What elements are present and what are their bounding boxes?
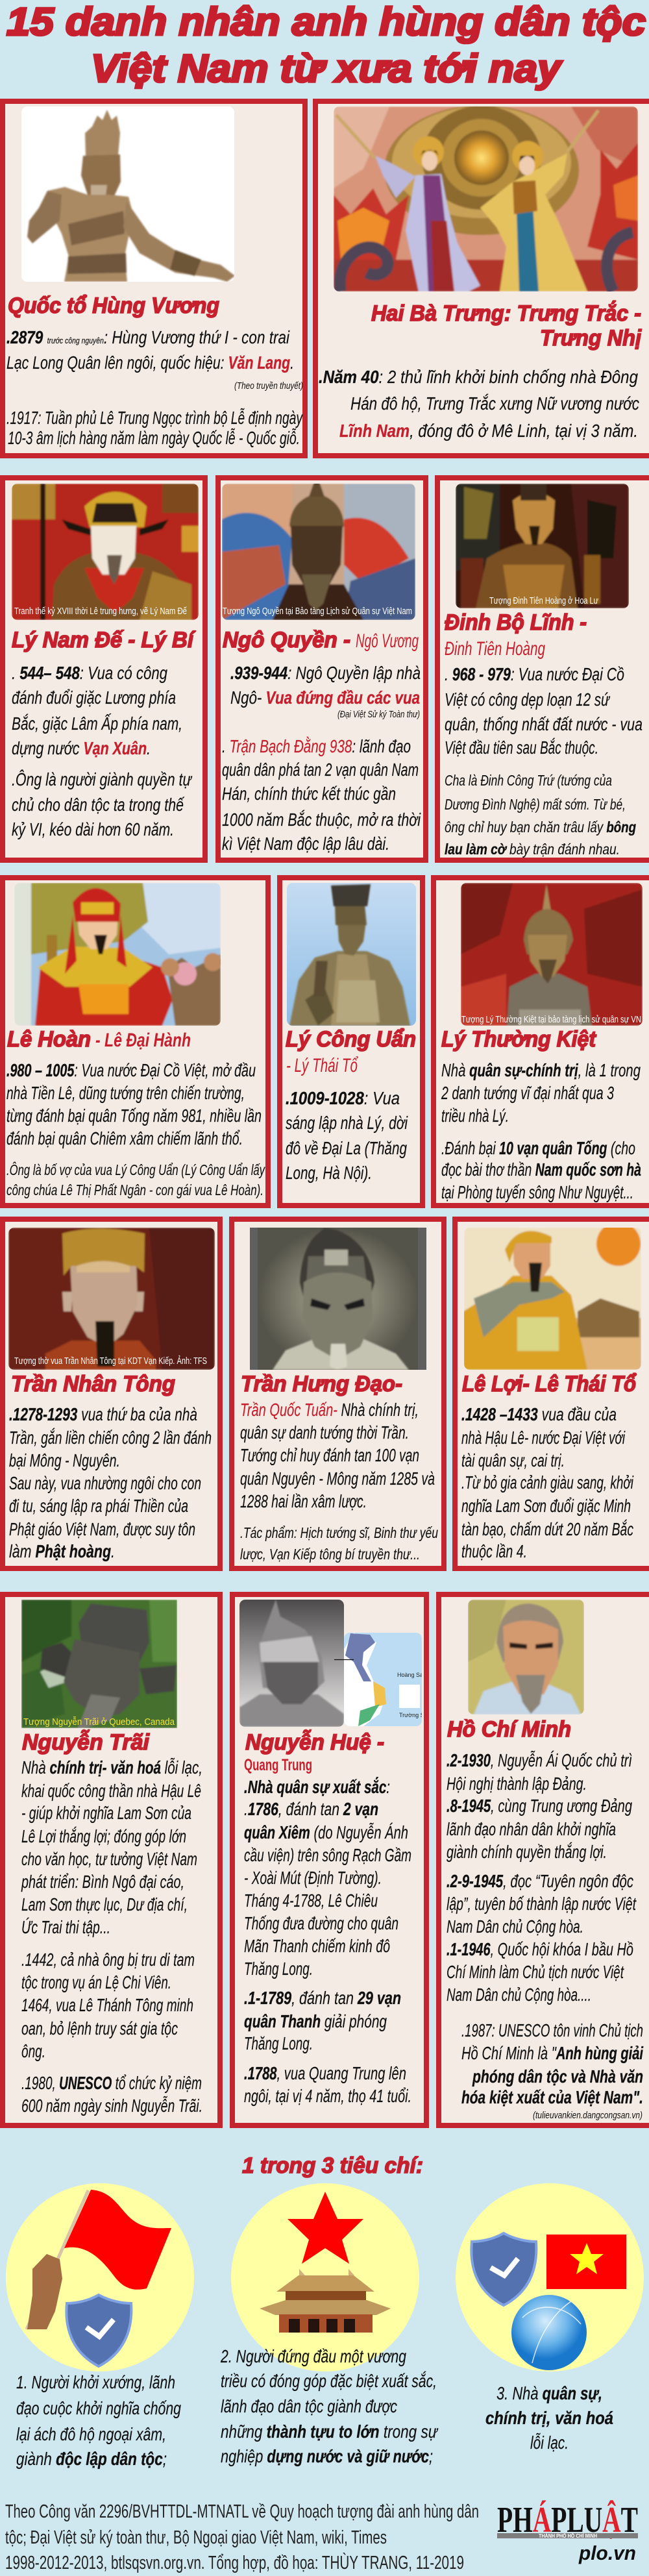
- text block: [319, 367, 639, 441]
- image caption: Tượng Đinh Tiên Hoàng ở Hoa Lư: [489, 595, 598, 606]
- text block: Ức Trai thi tập...: [21, 1917, 110, 1937]
- logo: Pháp Luật plo.vn: PHÁPLUẬT: [497, 2499, 638, 2540]
- text block: đánh bại quân Chiêm xâm chiếm lãnh thổ.: [6, 1128, 243, 1148]
- text block: .Ông là bố vợ của vua Lý Công Uẩn (Lý Công Uẩn lấy: [6, 1161, 265, 1178]
- image: Lý Công Uẩn statue: [287, 883, 416, 1026]
- criterion text: nghiệp dựng nước và giữ nước;: [221, 2446, 433, 2466]
- text block: ngôi, tại vị 4 năm, thọ 41 tuổi.: [244, 2086, 411, 2106]
- logo: Pháp Luật plo.vn: plo.vn: [578, 2542, 636, 2564]
- text block: Trần, gắn liền chiến công 2 lần đánh: [9, 1428, 212, 1448]
- text block: .1428 –1433 vua đầu của: [461, 1404, 617, 1424]
- criterion text: 2. Người đứng đầu một vương: [220, 2346, 406, 2366]
- logo: Pháp Luật plo.vn: [497, 2499, 638, 2564]
- heading: Trần Hưng Đạo-: [241, 1372, 402, 1396]
- panel: Lý Nam Đế: [3, 478, 205, 860]
- text block: Nhà chính trị- văn hoá lỗi lạc,: [21, 1757, 202, 1777]
- text block: .939-944: Ngô Quyền lập nhà: [230, 663, 421, 683]
- text block: [445, 664, 643, 858]
- text block: Hán, chính thức kết thúc gần: [222, 784, 396, 804]
- text block: Mãn Thanh chiếm kinh đô: [244, 1936, 390, 1956]
- text block: phát triển: Bình Ngô đại cáo,: [21, 1872, 184, 1892]
- heading: - Lê Đại Hành: [95, 1030, 191, 1051]
- text block: 600 năm ngày sinh Nguyễn Trãi.: [21, 2096, 202, 2116]
- heading: Hồ Chí Minh: [447, 1717, 571, 1742]
- text block: Tướng chỉ huy đánh tan 100 vạn: [240, 1445, 419, 1465]
- criterion text: 3. Nhà quân sự,: [496, 2383, 602, 2403]
- heading: [244, 1730, 384, 1774]
- heading: Lê Hoàn: [7, 1027, 91, 1052]
- text block: .1009-1028: Vua: [286, 1088, 400, 1108]
- heading: criteria: 1 trong 3 tiêu chí:: [242, 2153, 423, 2178]
- panel: Hai Bà Trưng: [315, 101, 649, 456]
- heading: Trần Nhân Tông: [11, 1372, 175, 1396]
- criterion text: lỗi lạc.: [530, 2433, 569, 2453]
- text block: .1786, đánh tan 2 vạn: [244, 1799, 378, 1819]
- heading: Ngô Quyền -: [223, 628, 350, 652]
- text block: ông chỉ huy bạn chăn trâu lấy bông: [445, 819, 636, 836]
- text block: .1917: Tuần phủ Lê Trung Ngọc trình bộ Lễ định ngày: [6, 408, 303, 428]
- panel: Nguyễn Trãi: [3, 1594, 220, 2125]
- criterion text: chính trị, văn hoá: [485, 2408, 613, 2428]
- criterion text: những thành tựu to lớn trong sự: [221, 2421, 439, 2442]
- title: 15 danh nhân anh hùng dân tộc: [6, 0, 646, 43]
- text block: 1000 năm Bắc thuộc, mở ra thời: [222, 810, 421, 830]
- image: Ngô Quyền bust: [222, 480, 415, 620]
- text block: (Đại Việt Sử ký Toàn thư): [337, 709, 420, 720]
- text block: - Xoài Mút (Định Tường).: [244, 1868, 382, 1888]
- heading: [223, 628, 419, 652]
- title: Việt Nam từ xưa tới nay: [91, 47, 563, 90]
- heading: Lý Thường Kiệt: [441, 1027, 597, 1052]
- text block: .1-1789, đánh tan 29 vạn: [244, 1988, 401, 2008]
- heading: [7, 1027, 191, 1052]
- criterion text: [16, 2372, 181, 2469]
- text block: .1442, cả nhà ông bị tru di tam: [21, 1950, 195, 1970]
- icon: raised flag: [27, 2190, 171, 2329]
- image: Lý Nam Đế painting: [12, 484, 199, 620]
- image caption: Tượng thờ vua Trần Nhân Tông tại KDT Vạn Kiếp. Ảnh: TFS: [14, 1356, 207, 1367]
- text block: Lê Lợi thắng lợi; đóng góp lớn: [21, 1826, 186, 1846]
- icon: red star: [288, 2192, 363, 2264]
- text block: [447, 1750, 644, 2121]
- source note: tộc; Đại Việt sử ký toàn thư, Bộ Ngoại giao Việt Nam, wiki, Times: [5, 2527, 387, 2548]
- text block: triều nhà Lý.: [441, 1106, 509, 1126]
- text block: Tháng 4-1788, Lê Chiêu: [244, 1890, 378, 1911]
- heading: Đinh Tiên Hoàng: [445, 638, 545, 660]
- criterion text: [485, 2383, 613, 2453]
- panel: Lý Công Uẩn: [280, 878, 422, 1206]
- panel: Trần Nhân Tông: [3, 1219, 220, 1568]
- text block: công chúa Lê Thị Phất Ngân - con gái vua Lê Hoàn).: [6, 1182, 263, 1198]
- text block: 10-3 âm lịch hàng năm làm ngày Quốc lễ - Quốc giỗ.: [8, 428, 300, 448]
- heading: Quang Trung: [244, 1756, 312, 1774]
- text block: sáng lập nhà Lý, dời: [286, 1113, 408, 1133]
- text block: quân dân phá tan 2 vạn quân Nam: [222, 760, 419, 780]
- icon: imperial palace: [260, 2269, 391, 2333]
- text block: . 544– 548: Vua có công: [12, 663, 167, 683]
- text block: [461, 1404, 634, 1561]
- text block: đánh đuổi giặc Lương phía: [12, 687, 176, 708]
- image: Trần Hưng Đạo portrait: [250, 1228, 426, 1370]
- text block: .Ông là người giành quyền tự: [12, 769, 193, 789]
- map pointer line: [334, 1659, 354, 1661]
- text block: nhà Tiền Lê, dũng tướng trên chiến trường,: [6, 1083, 245, 1103]
- text block: . Trận Bạch Đằng 938: lãnh đạo: [222, 736, 411, 756]
- image: Đinh Tiên Hoàng statue: [456, 484, 629, 608]
- text block: [441, 1060, 641, 1202]
- image caption: Tượng Ngô Quyền tại Bảo tàng Lịch sử Quân sự Việt Nam: [223, 606, 412, 617]
- heading: Lý Nam Đế - Lý Bí: [12, 628, 196, 652]
- text block: quân Thanh giải phóng: [244, 2011, 387, 2031]
- text block: 1464, vua Lê Thánh Tông minh: [21, 1995, 193, 2015]
- text block: quân Nguyên - Mông năm 1285 và: [240, 1468, 435, 1489]
- text block: .Đánh bại 10 vạn quân Tống (cho: [441, 1138, 635, 1158]
- text block: tộc trong vụ án Lệ Chi Viên.: [21, 1972, 171, 1992]
- text block: làm Phật hoàng.: [9, 1541, 115, 1561]
- yellow circle: [231, 2183, 419, 2372]
- panel: Ngô Quyền: [218, 478, 426, 860]
- text block: quân sự danh tướng thời Trần.: [240, 1422, 409, 1443]
- text block: Bắc, giặc Lâm Ấp phía nam,: [12, 713, 182, 734]
- text block: [244, 1777, 411, 2106]
- icon: shield with check: [471, 2233, 536, 2305]
- text block: Sau này, vua nhường ngôi cho con: [9, 1473, 201, 1493]
- text block: [12, 663, 193, 839]
- text block: .980 – 1005: Vua nước Đại Cồ Việt, mở đầu: [6, 1060, 256, 1080]
- heading: Lê Lợi- Lê Thái Tổ: [462, 1372, 637, 1396]
- text block: .Nhà quân sự xuất sắc:: [244, 1777, 390, 1797]
- image: Lê Lợi painting: [463, 1222, 641, 1370]
- text block: bại Mông - Nguyên.: [9, 1450, 120, 1470]
- image: map of Vietnam: Trường Sa: [399, 1712, 428, 1718]
- text block: Thăng Long.: [244, 1959, 313, 1979]
- heading: [371, 301, 642, 351]
- source note: 1998-2012-2013, btlsqsvn.org.vn. Tổng hợp, đồ họa: THÙY TRANG, 11-2019: [5, 2552, 464, 2573]
- text block: .1788, vua Quang Trung lên: [244, 2063, 406, 2083]
- criterion text: [220, 2346, 439, 2466]
- text block: Long, Hà Nội).: [286, 1163, 372, 1183]
- text block: quân Xiêm (do Nguyễn Ánh: [244, 1822, 408, 1842]
- heading: Đinh Bộ Lĩnh -: [445, 610, 587, 635]
- text block: [9, 1404, 212, 1561]
- text block: đi tu, sáng lập ra phái Thiền của: [9, 1496, 188, 1516]
- text block: chủ cho dân tộc ta trong thế: [12, 795, 185, 815]
- text block: từng đánh bại quân Tống năm 981, nhiều lần: [6, 1106, 262, 1126]
- text block: .Tác phẩm: Hịch tướng sĩ, Binh thư yếu: [240, 1524, 438, 1541]
- heading: Quốc tổ Hùng Vương: [8, 293, 219, 318]
- image caption: Tranh thế kỷ XVIII thời Lê trung hưng, vẽ Lý Nam Đế: [14, 606, 187, 617]
- text block: - giúp khởi nghĩa Lam Sơn của: [21, 1803, 191, 1823]
- text block: (Theo truyền thuyết): [234, 380, 303, 391]
- text block: Hội nghị thành lập Đảng.: [447, 1774, 587, 1794]
- text block: Phật giáo Việt Nam, được suy tôn: [9, 1519, 195, 1539]
- image: Hồ Chí Minh portrait: [468, 1600, 584, 1715]
- logo: Pháp Luật plo.vn: THÀNH PHỐ HỒ CHÍ MINH: [539, 2533, 597, 2539]
- panel: Đinh Bộ Lĩnh: [437, 478, 649, 860]
- text block: Nam Dân chủ Cộng hòa.: [447, 1916, 583, 1937]
- text block: [6, 1060, 265, 1198]
- criterion text: triều có đóng góp đặc biệt xuất sắc,: [221, 2371, 437, 2391]
- panel: Nguyễn Huệ: [232, 1594, 428, 2125]
- image: Hai Bà Trưng: [334, 105, 638, 291]
- panel: Hồ Chí Minh: [439, 1594, 649, 2125]
- text block: Lam Sơn thực lục, Dư địa chí,: [21, 1894, 188, 1914]
- heading: Ngô Vương: [356, 630, 419, 652]
- text block: đô về Đại La (Thăng: [286, 1138, 407, 1158]
- image caption: Tượng Nguyễn Trãi ở Quebec, Canada: [23, 1716, 175, 1728]
- panel: Lê Lợi: [455, 1219, 649, 1568]
- text block: ông.: [21, 2041, 45, 2061]
- image: map of Vietnam: [344, 1633, 428, 1726]
- text block: Lạc Long Quân lên ngôi, quốc hiệu: Văn Lang.: [6, 353, 294, 373]
- heading: [286, 1027, 416, 1076]
- heading: - Lý Thái Tổ: [286, 1055, 359, 1076]
- yellow circle: [6, 2183, 194, 2372]
- yellow circle: [456, 2183, 644, 2372]
- text block: tài quân sự, cai trị.: [461, 1450, 565, 1470]
- image: map of Vietnam: Hoàng Sa: [397, 1672, 423, 1678]
- heading: [445, 610, 587, 660]
- text block: Thống đưa đường cho quân: [244, 1913, 398, 1933]
- icon: globe: [511, 2295, 587, 2370]
- image: Lê Hoàn illustration: [14, 883, 222, 1026]
- text block: Thăng Long.: [244, 2033, 313, 2053]
- text block: kỷ VI, kéo dài hơn 60 năm.: [12, 819, 174, 839]
- text block: .1980, UNESCO tổ chức kỷ niệm: [21, 2073, 202, 2093]
- text block: thuộc lần 4.: [461, 1541, 527, 1561]
- text block: .2879 trước công nguyên: Hùng Vương thứ I - con trai: [6, 327, 290, 347]
- heading: Lý Công Uẩn: [286, 1027, 416, 1052]
- text block: cho văn học, tư tưởng Việt Nam: [21, 1849, 197, 1869]
- source note: [5, 2501, 479, 2573]
- panel: Trần Hưng Đạo: [232, 1219, 444, 1568]
- criterion text: đạo cuộc khởi nghĩa chống: [16, 2398, 181, 2418]
- text block: [222, 663, 421, 854]
- text block: 1288 hai lần xâm lược.: [240, 1491, 367, 1511]
- criterion text: lãnh đạo dân tộc giành được: [221, 2396, 397, 2416]
- heading: Trưng Nhị: [540, 326, 642, 351]
- text block: dựng nước Vạn Xuân.: [12, 738, 151, 758]
- panel: Lý Thường Kiệt: [434, 878, 649, 1206]
- criterion text: lại ách đô hộ ngoại xâm,: [16, 2424, 166, 2444]
- text block: [6, 327, 303, 448]
- criterion 1: [6, 2183, 194, 2469]
- text block: [240, 1400, 438, 1563]
- text block: Ngô- Vua đứng đầu các vua: [230, 687, 420, 708]
- text block: kì Việt Nam độc lập lâu dài.: [222, 834, 389, 854]
- image: Nguyễn Trãi statue: [21, 1600, 177, 1728]
- text block: [286, 1088, 408, 1183]
- title: [6, 0, 646, 90]
- image: Nguyễn Huệ portrait: [239, 1600, 344, 1727]
- panel: Quốc tổ Hùng Vương: [3, 101, 305, 456]
- heading: Nguyễn Huệ -: [245, 1730, 384, 1755]
- criterion text: giành độc lập dân tộc;: [16, 2449, 167, 2469]
- text block: oan, bỏ lệnh truy sát gia tộc: [21, 2018, 178, 2038]
- criterion 2: [220, 2183, 439, 2466]
- panel: Lê Hoàn: [3, 878, 268, 1206]
- text block: lau làm cờ bày trận đánh nhau.: [445, 841, 620, 858]
- heading: Hai Bà Trưng: Trưng Trắc -: [371, 301, 641, 326]
- text block: .1278-1293 vua thứ ba của nhà: [9, 1404, 197, 1424]
- text block: cầu viện) trên sông Rạch Gầm: [244, 1845, 411, 1865]
- image: Trần Nhân Tông statue: [8, 1228, 215, 1370]
- icon: shield with check: [66, 2295, 131, 2366]
- criterion text: 1. Người khởi xướng, lãnh: [16, 2372, 175, 2392]
- heading: Nguyễn Trãi: [22, 1730, 151, 1755]
- image: Hùng Vương statue: [21, 106, 235, 282]
- text block: [21, 1757, 202, 2116]
- text block: khai quốc công thần nhà Hậu Lê: [21, 1781, 201, 1801]
- image: Lý Thường Kiệt bust: [461, 883, 643, 1026]
- text block: Trần Quốc Tuấn- Nhà chính trị,: [240, 1400, 419, 1420]
- criterion 3: [456, 2183, 644, 2453]
- text block: lược, Vạn Kiếp tông bí truyền thư...: [240, 1546, 420, 1563]
- icon: Vietnamese flag: [546, 2235, 626, 2289]
